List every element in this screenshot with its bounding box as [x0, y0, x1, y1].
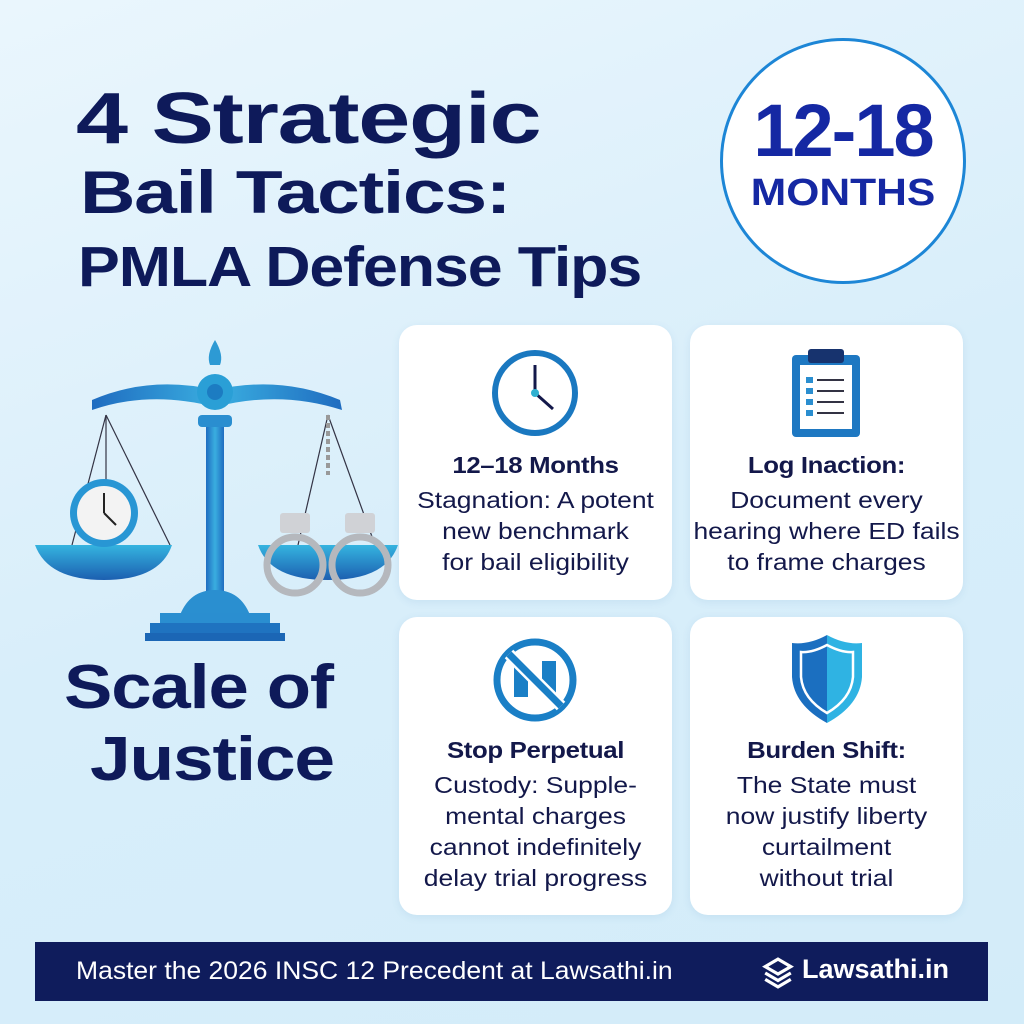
title: 4 Strategic — [76, 79, 540, 159]
panel: burden shift: curtailment — [762, 834, 891, 860]
panel: stop perpetual custody: Custody: Supple- — [434, 772, 637, 798]
panel: 12-18 months: new benchmark — [442, 518, 629, 544]
panel: burden shift: without trial — [760, 865, 893, 891]
title: Bail Tactics: — [80, 159, 510, 226]
panel: stop perpetual custody: Stop Perpetual — [447, 737, 624, 763]
panel: stop perpetual custody: cannot indefinitely — [430, 834, 641, 860]
panel: 12-18 months — [399, 325, 672, 600]
panel: burden shift: The State must — [737, 772, 916, 798]
panel: 12-18 months: 12–18 Months — [452, 452, 619, 478]
panel: stop perpetual custody — [399, 617, 672, 915]
icon: shield — [792, 635, 862, 723]
title — [76, 79, 641, 299]
panel: log inaction: hearing where ED fails — [693, 518, 960, 544]
footer bar — [35, 942, 988, 1001]
callout: 12-18 months circle — [720, 38, 966, 284]
logo — [762, 954, 949, 989]
icon: clipboard — [792, 349, 860, 437]
heading: Scale of Justice: Scale of — [64, 653, 333, 722]
panel: 12-18 months: Stagnation: A potent — [417, 487, 654, 513]
panel: burden shift — [690, 617, 963, 915]
icon: clock — [492, 350, 578, 436]
panel: log inaction — [690, 325, 963, 600]
icon: prohibition sign — [494, 638, 576, 722]
panel: stop perpetual custody: delay trial progress — [424, 865, 647, 891]
callout: 12-18 months circle: 12-18 — [753, 89, 933, 172]
panel: burden shift: now justify liberty — [726, 803, 927, 829]
heading: Scale of Justice: Justice — [90, 725, 334, 794]
panel: log inaction: Log Inaction: — [748, 452, 905, 478]
icon: scale of justice — [35, 340, 398, 641]
footer text: Master the 2026 INSC 12 Precedent at Lawsathi.in — [76, 957, 673, 985]
callout: 12-18 months circle: MONTHS — [751, 172, 935, 214]
logo: Lawsathi.in — [802, 954, 949, 984]
panel: log inaction: Document every — [730, 487, 923, 513]
title: PMLA Defense Tips — [78, 235, 641, 299]
panel: 12-18 months: for bail eligibility — [442, 549, 629, 575]
heading: Scale of Justice — [64, 653, 334, 794]
panel: burden shift: Burden Shift: — [747, 737, 906, 763]
panel: stop perpetual custody: mental charges — [445, 803, 626, 829]
panel: log inaction: to frame charges — [727, 549, 926, 575]
